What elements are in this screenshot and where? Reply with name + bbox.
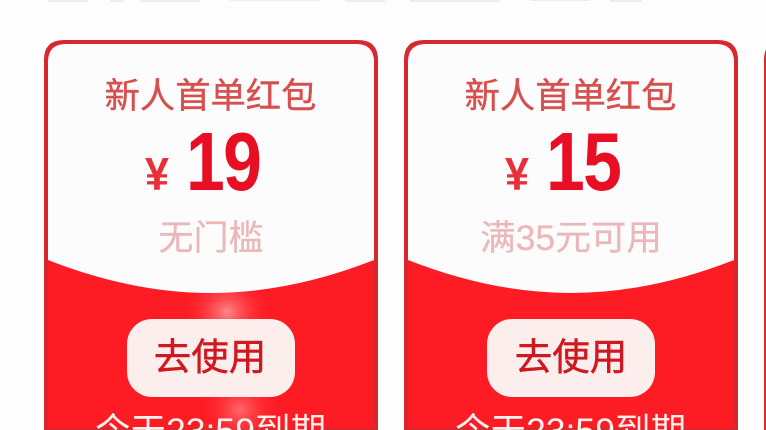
panel: coupon 19 yuan bbox=[46, 42, 376, 430]
cropped text line at top bbox=[48, 0, 642, 2]
threshold: 无门槛 bbox=[158, 219, 264, 258]
shine on red band bbox=[183, 272, 280, 430]
threshold: 满35元可用 bbox=[480, 219, 662, 258]
card red base bbox=[406, 42, 736, 430]
card white top bbox=[408, 44, 734, 293]
amount: ¥ bbox=[505, 148, 529, 200]
button bbox=[127, 319, 295, 397]
button: 去使用 bbox=[515, 336, 627, 378]
card white top bbox=[48, 44, 374, 293]
button: 去使用 bbox=[154, 336, 266, 378]
amount: 15 bbox=[546, 116, 620, 208]
button bbox=[487, 319, 655, 397]
amount bbox=[145, 116, 260, 208]
amount: ¥ bbox=[145, 148, 169, 200]
heading: 新人首单红包 bbox=[465, 77, 676, 116]
card red base bbox=[46, 42, 376, 430]
panel: coupon 15 yuan bbox=[406, 42, 736, 430]
amount: 19 bbox=[186, 116, 260, 208]
heading: 新人首单红包 bbox=[105, 77, 316, 116]
amount bbox=[505, 116, 620, 208]
